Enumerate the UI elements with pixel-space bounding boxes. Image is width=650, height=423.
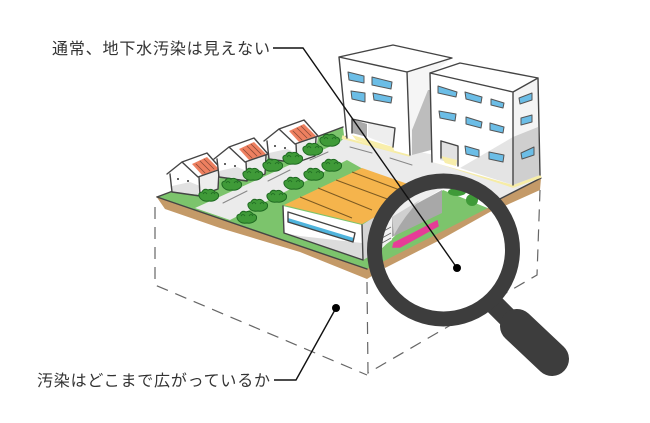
leader line: top xyxy=(273,48,461,272)
magnifying glass xyxy=(374,181,552,359)
label: top: 通常、地下水汚染は見えない xyxy=(52,40,270,58)
ground block xyxy=(156,127,541,279)
houses xyxy=(167,120,318,196)
soil layer xyxy=(156,178,541,279)
leader line: bottom xyxy=(274,304,340,380)
dashed underground volume xyxy=(155,190,540,375)
road xyxy=(195,136,541,220)
bushes in lens xyxy=(448,189,466,196)
pink contamination xyxy=(393,221,438,247)
handle xyxy=(488,298,519,329)
left building xyxy=(339,45,452,155)
magnifier lens view xyxy=(382,188,492,268)
right building xyxy=(430,63,540,185)
label: bottom: 汚染はどこまで広がっているか xyxy=(37,372,270,390)
yellow pavement line xyxy=(342,137,541,186)
warehouse wall in lens xyxy=(392,190,442,237)
warehouse xyxy=(283,168,425,260)
warehouse facade xyxy=(283,206,363,260)
warehouse roof xyxy=(284,168,425,224)
bushes xyxy=(199,134,342,223)
grass surface xyxy=(157,127,500,269)
ring xyxy=(374,181,512,319)
warehouse side xyxy=(362,200,400,260)
